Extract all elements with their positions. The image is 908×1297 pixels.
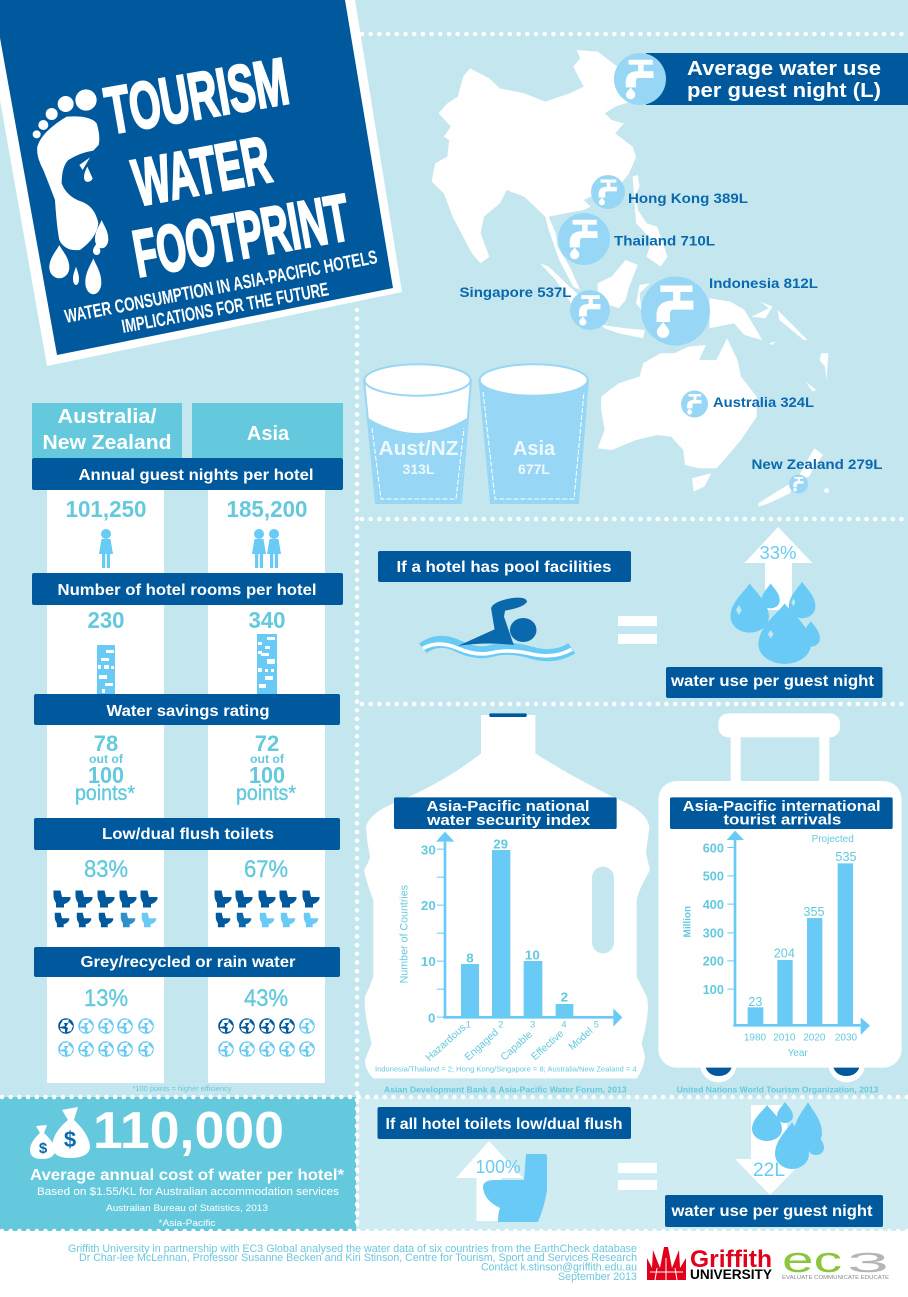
heading: average water use: Average water use — [687, 58, 881, 80]
icon: money bags: $ — [64, 1127, 76, 1152]
arrow: down 22L: 22L — [753, 1160, 785, 1181]
chart labels: 355 — [803, 905, 825, 919]
stat: 72 out of 100 points: 72 — [255, 731, 279, 756]
map marker: Australia — [681, 390, 814, 418]
bar: low/dual flush toilets: Low/dual flush toilets — [102, 826, 274, 843]
bar: annual guest nights: Annual guest nights per hotel — [78, 467, 314, 484]
arrow: up 100%: 100% — [476, 1157, 520, 1177]
chart bars — [748, 863, 853, 1025]
logo: EC3: EVALUATE COMMUNICATE EDUCATE — [782, 1275, 890, 1281]
column header: Australia/New Zealand: New Zealand — [42, 432, 172, 454]
subtitle: WATER CONSUMPTION IN ASIA-PACIFIC HOTELS — [63, 247, 379, 328]
bar: low/dual flush toilets — [34, 818, 340, 850]
bar: water use toilets — [665, 1195, 883, 1227]
chart labels — [421, 836, 568, 1026]
logo: Griffith University: Griffith — [690, 1246, 772, 1273]
chart panel: suitcase, international tourist arrivals: 2010 — [773, 1033, 796, 1044]
map marker: Indonesia: Indonesia 812L — [709, 275, 818, 291]
chart panel: suitcase, international tourist arrivals: 2030 — [835, 1033, 858, 1044]
chart labels — [703, 841, 857, 1009]
stat: 72 out of 100 points: 100 — [249, 762, 285, 788]
map marker: New Zealand — [752, 456, 883, 494]
stat: 78 out of 100 points — [75, 731, 135, 805]
icon: money bags — [30, 1107, 90, 1159]
bar: number of rooms — [32, 573, 343, 605]
bar: number of rooms: Number of hotel rooms per hotel — [58, 582, 316, 599]
chart labels: 10 — [421, 954, 436, 969]
stat: 101,250: 101,250 — [66, 496, 146, 522]
arrow: down 22L — [735, 1105, 805, 1195]
heading: tourist arrivals: tourist arrivals — [723, 811, 841, 828]
heading: water security index — [394, 797, 617, 829]
heading: average water use: per guest night (L) — [687, 80, 881, 102]
heading: title: WATER — [127, 122, 276, 220]
stat: 13%: 13% — [84, 985, 128, 1012]
note: based on: Based on $1.55/KL for Australian accommodation services — [37, 1186, 340, 1198]
note: Asia-Pacific: *Asia-Pacific — [158, 1218, 216, 1228]
heading: water security index: water security index — [426, 812, 591, 829]
icon: tap heading — [614, 53, 666, 105]
stat: 67%: 67% — [244, 856, 288, 883]
icon: footprint with drops — [33, 89, 108, 294]
icon: two people — [252, 529, 281, 568]
stat: 72 out of 100 points: points* — [236, 782, 296, 805]
chart panel: water bottle, national water security index: Hazardous — [424, 1022, 468, 1064]
chart bars — [461, 850, 573, 1017]
icon: equals pool — [618, 616, 657, 644]
chart labels: 500 — [703, 870, 724, 884]
stat: 78 out of 100 points: 100 — [88, 762, 124, 788]
stat: 78 out of 100 points: points* — [75, 782, 135, 805]
arrow: up 100% — [456, 1141, 523, 1221]
logo: EC3 — [782, 1239, 890, 1281]
chart panel: suitcase, international tourist arrivals: Million — [683, 906, 694, 937]
stat: 78 out of 100 points: 78 — [94, 731, 118, 756]
stat: 230: 230 — [88, 607, 124, 633]
map marker: Thailand: Thailand 710L — [614, 232, 715, 248]
stat: 72 out of 100 points — [236, 731, 296, 805]
stat: 83%: 83% — [84, 856, 128, 883]
bar: grey/recycled water: Grey/recycled or rain water — [80, 954, 296, 971]
chart labels: 23 — [748, 995, 762, 1009]
bar: grey/recycled water — [34, 947, 340, 977]
chart panel: suitcase, international tourist arrivals: Year — [788, 1048, 808, 1059]
column header: Australia/New Zealand: Australia/ — [58, 406, 157, 428]
chart source: Asian Development Bank & Asia-Pacific Water Forum, 2013 — [384, 1084, 627, 1094]
chart footnote: Indonesia/Thailand = 2; Hong Kong/Singapore = 8; Australia/New Zealand = 4 — [375, 1067, 637, 1074]
chart labels: 29 — [493, 836, 508, 851]
stat: 72 out of 100 points: out of — [250, 752, 285, 766]
white column: Asia — [208, 489, 325, 1083]
chart labels: 204 — [774, 946, 795, 960]
icon: building short — [97, 645, 115, 694]
logo: EC3: 3 — [847, 1247, 889, 1278]
pictogram: recycle 13% — [58, 1018, 154, 1057]
chart: glass Asia — [480, 364, 588, 503]
subtitle — [63, 247, 379, 338]
heading: tourist arrivals: Asia-Pacific international — [683, 798, 881, 815]
footer credits: Griffith University in partnership with EC3 Global analysed the water data of six countries from the EarthCheck database — [68, 1243, 637, 1255]
bar: annual guest nights — [32, 458, 343, 490]
pictogram: toilets 67% — [214, 890, 320, 927]
column header: Asia — [192, 403, 343, 458]
chart: glass Aust/NZ: 313L — [403, 461, 435, 477]
chart panel: water bottle, national water security index: Engaged — [463, 1027, 501, 1063]
arrow: up 33%: 33% — [760, 543, 796, 563]
footer credits: September 2013 — [558, 1271, 637, 1283]
map marker: Thailand — [558, 213, 715, 265]
white column: Australia/New Zealand — [47, 489, 164, 1083]
chart labels: 535 — [835, 850, 857, 864]
bar: water use pool — [666, 667, 882, 698]
stat: 185,200: 185,200 — [226, 496, 308, 522]
chart labels: 200 — [703, 955, 724, 969]
heading: title — [100, 44, 355, 291]
chart panel: water bottle, national water security index: 3 — [530, 1019, 535, 1029]
column header: Asia: Asia — [247, 423, 290, 445]
map marker: Hong Kong — [591, 175, 748, 209]
chart panel: water bottle, national water security index: 1 — [466, 1019, 471, 1029]
map marker: Australia: Australia 324L — [713, 394, 814, 410]
chart labels: 8 — [466, 950, 474, 965]
chart: glass Aust/NZ: Aust/NZ — [378, 438, 458, 460]
chart labels: 30 — [421, 842, 436, 857]
bar: water savings rating — [34, 694, 340, 725]
callout: toilets heading: If all hotel toilets low/dual flush — [386, 1116, 622, 1133]
chart: glass Asia: Asia — [513, 438, 556, 460]
bar: water savings rating: Water savings rating — [106, 703, 270, 720]
heading: average water use — [646, 53, 908, 105]
panel: lower right background — [357, 1097, 908, 1231]
map marker: Singapore — [460, 284, 610, 330]
map: Asia-Pacific — [432, 50, 829, 507]
map marker: New Zealand: New Zealand 279L — [752, 456, 883, 472]
footer credits: Contact k.stinson@griffith.edu.au — [481, 1262, 637, 1274]
panel: title banner — [0, 0, 402, 366]
panel: footer background — [0, 1231, 908, 1297]
column header: Australia/New Zealand — [32, 403, 182, 458]
logo: EC3: ec — [782, 1239, 842, 1280]
icon: money bags: $ — [39, 1140, 48, 1157]
caption: average annual cost: Average annual cost of water per hotel* — [30, 1167, 345, 1184]
icon: one person — [99, 529, 113, 568]
logo: Griffith University — [647, 1246, 773, 1282]
stat: 110,000: 110,000 — [93, 1102, 284, 1160]
bar: water use toilets: water use per guest night — [670, 1203, 872, 1220]
chart labels: 400 — [703, 898, 724, 912]
logo: Griffith University: UNIVERSITY — [690, 1266, 773, 1282]
chart panel: suitcase, international tourist arrivals: 1980 — [744, 1033, 767, 1044]
stat: 78 out of 100 points: out of — [89, 752, 124, 766]
chart panel: water bottle, national water security index: 4 — [561, 1019, 567, 1029]
chart panel: water bottle, national water security index: Model — [567, 1026, 595, 1053]
chart panel: water bottle, national water security index: 2 — [498, 1019, 503, 1029]
chart panel: water bottle, national water security index — [364, 713, 650, 1094]
chart panel: water bottle, national water security index: Number of Countries — [398, 885, 410, 983]
chart labels: 300 — [703, 927, 724, 941]
heading: water security index: Asia-Pacific national — [426, 798, 589, 815]
chart axes — [436, 832, 622, 1027]
chart axes — [727, 831, 870, 1035]
callout: pool heading — [378, 551, 631, 582]
chart: glass Aust/NZ — [364, 364, 471, 503]
chart labels: 20 — [421, 898, 436, 913]
chart labels: 0 — [428, 1011, 435, 1026]
footer credits: Dr Char-lee McLennan, Professor Susanne Becken and Kiri Stinson, Centre for Tourism, Sport and Services Research — [79, 1252, 637, 1264]
footer credits — [68, 1243, 637, 1283]
map marker: Hong Kong: Hong Kong 389L — [628, 190, 748, 206]
chart panel: water bottle, national water security index: 5 — [594, 1019, 599, 1029]
icon: water drops toilets — [752, 1102, 824, 1169]
heading: tourist arrivals — [670, 797, 893, 829]
chart labels: 10 — [525, 947, 540, 962]
icon: toilet — [483, 1154, 547, 1222]
callout: pool heading: If a hotel has pool facilities — [396, 559, 612, 576]
map marker: Singapore: Singapore 537L — [460, 284, 572, 300]
map marker: Indonesia — [641, 275, 818, 346]
icon: equals toilets — [618, 1163, 657, 1190]
stat: 340: 340 — [248, 607, 286, 633]
chart panel: suitcase, international tourist arrivals: 2020 — [803, 1033, 826, 1044]
chart panel: water bottle, national water security index: Effective — [530, 1028, 566, 1063]
chart labels: 600 — [703, 841, 724, 855]
icon: building tall — [257, 634, 277, 694]
subtitle: IMPLICATIONS FOR THE FUTURE — [120, 279, 330, 338]
arrow: up 33% — [744, 527, 812, 610]
heading: title: FOOTPRINT — [127, 180, 355, 291]
chart source: United Nations World Tourism Organization, 2013 — [677, 1084, 879, 1094]
callout: toilets heading — [378, 1107, 631, 1139]
icon: swimmer — [423, 598, 572, 656]
heading: title: TOURISM — [100, 44, 294, 148]
chart: glass Asia: 677L — [518, 461, 550, 477]
footnote: points: *100 points = higher efficiency — [132, 1084, 232, 1093]
chart labels: 100 — [703, 983, 724, 997]
chart labels: 2 — [561, 990, 568, 1005]
pictogram: recycle 43% — [218, 1018, 315, 1057]
source: ABS: Australian Bureau of Statistics, 2013 — [106, 1203, 268, 1213]
chart panel: water bottle, national water security index: Capable — [499, 1029, 535, 1063]
panel: annual cost of water — [0, 1097, 356, 1231]
stat: 43%: 43% — [244, 985, 288, 1012]
chart panel: suitcase, international tourist arrivals: Projected — [812, 834, 854, 845]
bar: water use pool: water use per guest night — [670, 673, 874, 690]
icon: water drops pool — [730, 582, 820, 664]
pictogram: toilets 83% — [54, 890, 158, 927]
chart panel: suitcase, international tourist arrivals — [658, 713, 902, 1094]
